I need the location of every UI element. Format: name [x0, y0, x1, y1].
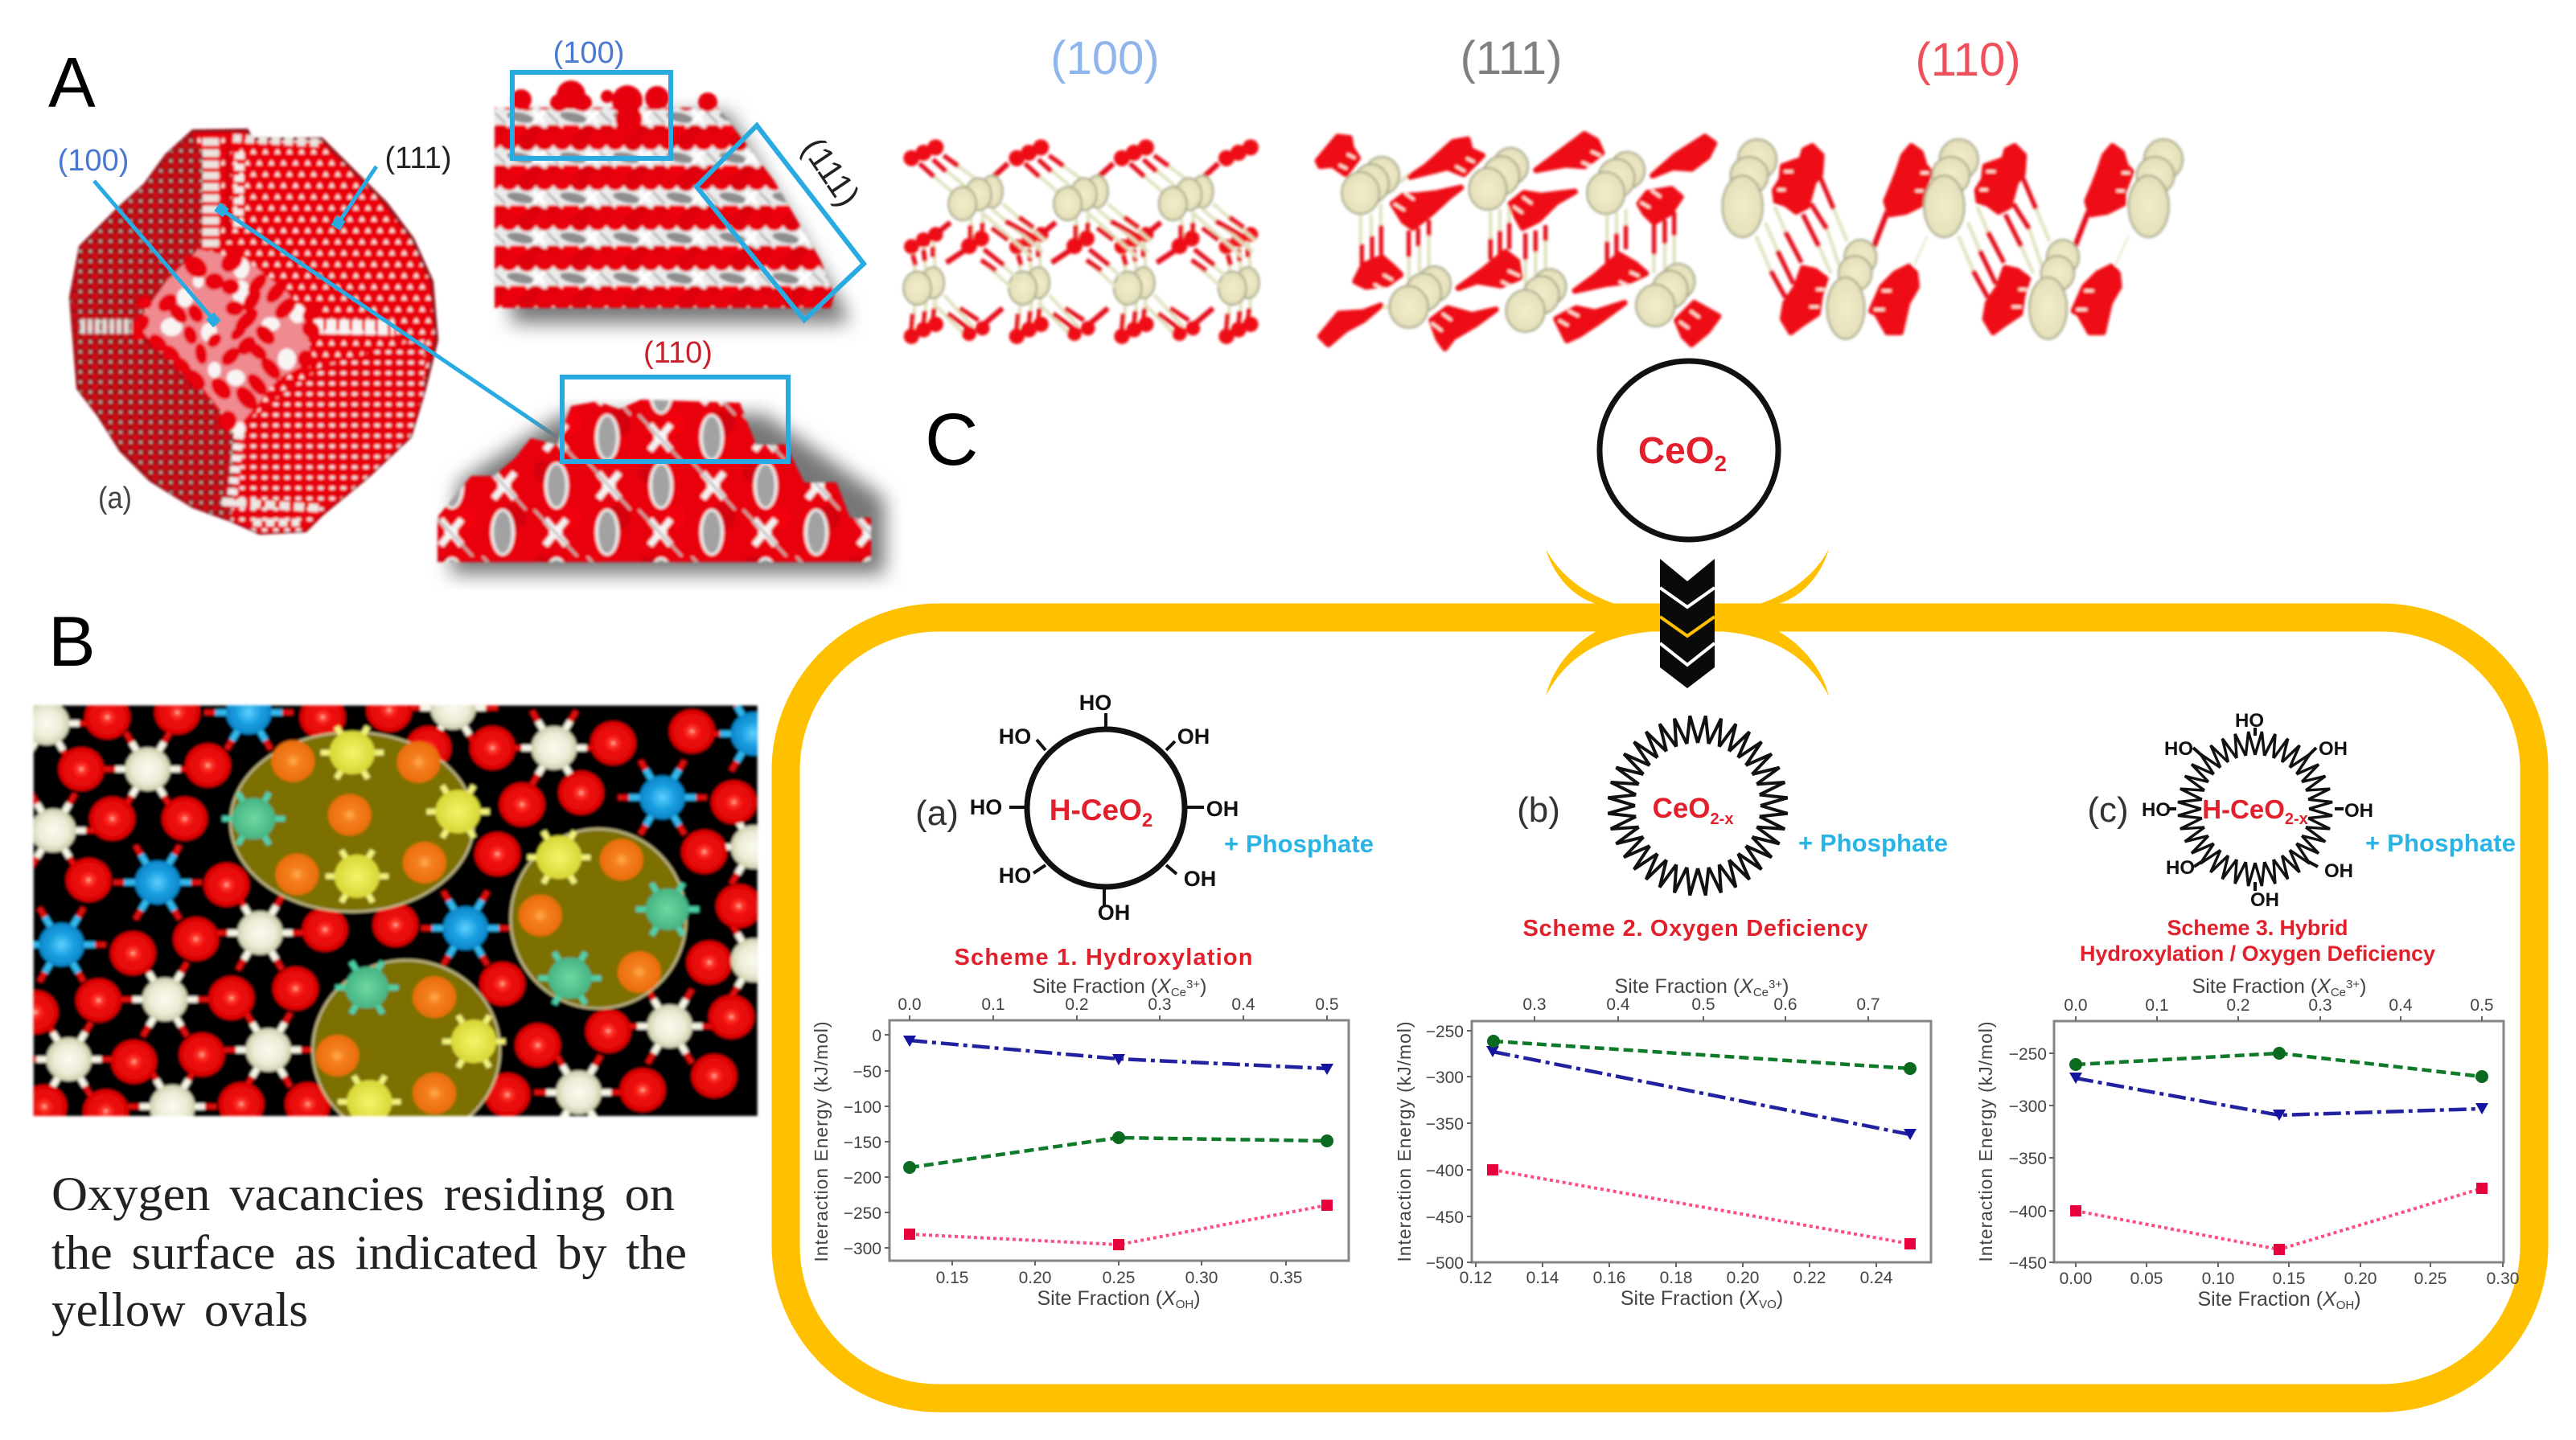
scheme (b): oxygen deficient particle: 2-x	[1711, 810, 1733, 828]
text block: caption	[51, 1167, 687, 1336]
label: (c): (c)	[2087, 790, 2129, 830]
crystal slab: (110) cross-section	[438, 400, 885, 574]
scheme (c): hybrid particle: OH	[2344, 800, 2373, 822]
heading: (111) structure: (111)	[1461, 32, 1562, 84]
heading: Scheme 2: Scheme 2. Oxygen Deficiency	[1523, 916, 1867, 942]
line chart: scheme 3 interaction energy: )	[2354, 1288, 2361, 1311]
label: (110) slab: (110)	[643, 336, 713, 370]
line chart: scheme 1 interaction energy: 0.25	[1103, 1269, 1135, 1287]
callout box: (100) region	[512, 72, 671, 158]
callout: vacancy oval 1	[222, 727, 490, 912]
label: (b): (b)	[1517, 790, 1560, 830]
line chart: scheme 3 interaction energy: −400	[2009, 1203, 2047, 1221]
line chart: scheme 1 interaction energy: 0	[872, 1027, 881, 1045]
bonds	[2, 671, 798, 1143]
line chart: scheme 2 interaction energy: Ce	[1753, 986, 1769, 999]
line chart: scheme 1 interaction energy: −250	[844, 1204, 881, 1223]
text block: caption: the surface as indicated by the	[51, 1226, 687, 1279]
arrow: black chevrons	[1660, 559, 1715, 688]
line chart: scheme 1 interaction energy: −50	[853, 1063, 881, 1081]
line chart: scheme 3 interaction energy: −300	[2009, 1097, 2047, 1116]
heading: (100) structure: (100)	[1050, 32, 1160, 84]
line chart: scheme 3 interaction energy: OH	[2336, 1298, 2354, 1312]
line chart: scheme 1 interaction energy: Site Fraction (X	[1037, 1287, 1176, 1310]
line chart: scheme 1 interaction energy	[811, 975, 1349, 1311]
line chart: scheme 3 interaction energy: 3+	[2346, 978, 2360, 991]
line chart: scheme 2 interaction energy: −300	[1426, 1069, 1464, 1087]
line chart: scheme 2 interaction energy: 0.5	[1691, 995, 1715, 1014]
scheme (c): hybrid particle: OH	[2250, 889, 2279, 911]
structure: (110) surface	[1723, 139, 2183, 339]
line chart: scheme 3 interaction energy: 0.20	[2344, 1270, 2377, 1288]
line chart: scheme 3 interaction energy: −450	[2009, 1254, 2047, 1273]
line chart: scheme 2 interaction energy: −450	[1426, 1208, 1464, 1227]
line chart: scheme 2 interaction energy: )	[1777, 1287, 1783, 1310]
label: (100) slab: (100)	[553, 36, 624, 70]
frame: rounded yellow border with flares	[786, 549, 2534, 1398]
line chart: scheme 3 interaction energy: 0.1	[2145, 996, 2169, 1015]
line chart: scheme 1 interaction energy: )	[1194, 1287, 1201, 1310]
scheme (a): hydroxylated particle: H-CeO	[1050, 794, 1142, 827]
line chart: scheme 3 interaction energy: Interaction Energy (kJ/mol)	[1975, 1021, 1996, 1262]
line chart: scheme 1 interaction energy: Interaction Energy (kJ/mol)	[811, 1021, 832, 1262]
heading: Scheme 3	[2080, 916, 2435, 966]
scheme (a): hydroxylated particle: OH	[1206, 797, 1239, 821]
panel: facet atomic structures	[903, 32, 2183, 348]
line chart: scheme 2 interaction energy: 0.24	[1860, 1269, 1893, 1287]
line chart: scheme 2 interaction energy: Site Fraction (X	[1615, 975, 1753, 998]
line chart: scheme 2 interaction energy: 0.16	[1593, 1269, 1625, 1287]
scheme (a): hydroxylated particle: OH	[1184, 867, 1216, 891]
line chart: scheme 3 interaction energy: 0.00	[2060, 1270, 2092, 1288]
icon: faceted CeO2 nanoparticle	[71, 130, 437, 533]
line chart: scheme 3 interaction energy: 0.25	[2414, 1270, 2447, 1288]
label: (a): (a)	[915, 794, 959, 833]
label: + Phosphate (b): + Phosphate	[1798, 829, 1948, 857]
callout: vacancy oval 3	[313, 960, 505, 1139]
scheme (c): hybrid particle: H-CeO	[2202, 794, 2285, 824]
line chart: scheme 1 interaction energy: 0.35	[1270, 1269, 1302, 1287]
line chart: scheme 3 interaction energy: 0.3	[2308, 996, 2332, 1015]
scheme (a): hydroxylated particle: OH	[1177, 724, 1210, 749]
line chart: scheme 1 interaction energy: 0.2	[1065, 995, 1089, 1014]
label: + Phosphate (a): + Phosphate	[1224, 830, 1374, 858]
line chart: scheme 3 interaction energy: −350	[2009, 1150, 2047, 1168]
line chart: scheme 3 interaction energy: )	[2360, 975, 2366, 998]
scheme (a): hydroxylated particle: 2	[1142, 810, 1152, 831]
line chart: scheme 1 interaction energy: 0.30	[1185, 1269, 1218, 1287]
label: (111) slab: (111)	[795, 131, 868, 213]
heading: C: C	[925, 399, 978, 481]
scheme (a): hydroxylated particle: HO	[999, 864, 1031, 888]
line chart: scheme 1 interaction energy: 0.3	[1148, 995, 1172, 1014]
line chart: scheme 1 interaction energy: Ce	[1171, 986, 1186, 999]
oxygen atoms	[13, 688, 762, 1133]
icon: CeO2 circle: CeO	[1638, 429, 1715, 471]
label: + Phosphate (c): + Phosphate	[2365, 829, 2516, 857]
panel B: oxygen vacancies	[2, 601, 798, 1336]
line chart: scheme 2 interaction energy: 0.20	[1727, 1269, 1759, 1287]
line chart: scheme 3 interaction energy: 0.4	[2389, 996, 2413, 1015]
line chart: scheme 3 interaction energy	[1975, 975, 2519, 1312]
line chart: scheme 1 interaction energy: −200	[844, 1169, 881, 1188]
line chart: scheme 1 interaction energy: 0.1	[981, 995, 1005, 1014]
line chart: scheme 1 interaction energy: 0.15	[936, 1269, 968, 1287]
line chart: scheme 1 interaction energy: Site Fraction (X	[1033, 975, 1171, 998]
line chart: scheme 1 interaction energy: )	[1200, 975, 1206, 998]
line chart: scheme 2 interaction energy: 3+	[1769, 978, 1782, 991]
callout box: (111) region	[696, 125, 864, 320]
scheme (b): oxygen deficient particle	[1588, 690, 1808, 921]
scheme (c): hybrid particle: OH	[2324, 860, 2353, 882]
label: (111) on particle: (111)	[384, 142, 452, 175]
structure: (111) surface	[1317, 134, 1719, 348]
icon: CeO2 circle: 2	[1715, 451, 1727, 476]
line chart: scheme 3 interaction energy: 0.30	[2487, 1270, 2519, 1288]
line chart: scheme 1 interaction energy: 0.20	[1019, 1269, 1051, 1287]
line chart: scheme 2 interaction energy: 0.12	[1460, 1269, 1492, 1287]
line chart: scheme 2 interaction energy: 0.18	[1660, 1269, 1692, 1287]
heading: Scheme 3: Hydroxylation / Oxygen Deficiency	[2080, 942, 2435, 966]
cerium atoms	[24, 686, 776, 1128]
line chart: scheme 2 interaction energy: 0.14	[1526, 1269, 1559, 1287]
text block: caption: Oxygen vacancies residing on	[51, 1167, 675, 1221]
line chart: scheme 3 interaction energy: Site Fraction (X	[2192, 975, 2331, 998]
line chart: scheme 1 interaction energy: −300	[844, 1240, 881, 1258]
scheme (a): hydroxylated particle: HO	[1079, 691, 1111, 715]
line chart: scheme 2 interaction energy: −250	[1426, 1023, 1464, 1041]
line chart: scheme 2 interaction energy: 0.22	[1793, 1269, 1826, 1287]
scheme (a): hydroxylated particle	[970, 691, 1239, 925]
line chart: scheme 3 interaction energy: 0.2	[2226, 996, 2250, 1015]
panel C: surface schemes frame	[786, 361, 2534, 1398]
line chart: scheme 2 interaction energy: Interaction Energy (kJ/mol)	[1394, 1021, 1415, 1262]
scheme (c): hybrid particle: HO	[2166, 857, 2195, 879]
line chart: scheme 3 interaction energy: 0.05	[2130, 1270, 2163, 1288]
line chart: scheme 2 interaction energy: −400	[1426, 1162, 1464, 1180]
line chart: scheme 2 interaction energy: 0.3	[1522, 995, 1547, 1014]
line chart: scheme 2 interaction energy: −500	[1426, 1254, 1464, 1273]
heading: Scheme 1: Scheme 1. Hydroxylation	[954, 945, 1253, 970]
scheme (a): hydroxylated particle: HO	[999, 724, 1031, 749]
scheme (c): hybrid particle: OH	[2319, 738, 2348, 760]
text block: caption: yellow ovals	[51, 1283, 308, 1336]
line chart: scheme 2 interaction energy: )	[1782, 975, 1789, 998]
line chart: scheme 2 interaction energy: −350	[1426, 1115, 1464, 1134]
line chart: scheme 1 interaction energy: 0.0	[898, 995, 922, 1014]
scheme (c): hybrid particle	[2142, 709, 2373, 911]
structure: (100) surface	[903, 139, 1259, 344]
line chart: scheme 2 interaction energy: VO	[1759, 1298, 1777, 1311]
icon: CeO2 circle	[1600, 361, 1778, 539]
line chart: scheme 3 interaction energy: −250	[2009, 1045, 2047, 1064]
line chart: scheme 3 interaction energy: 0.5	[2470, 996, 2494, 1015]
line chart: scheme 3 interaction energy: 0.15	[2273, 1270, 2305, 1288]
scheme (c): hybrid particle: HO	[2142, 799, 2171, 821]
callout box: (110) region	[562, 377, 788, 462]
central cross of large surface atoms	[131, 248, 321, 435]
scheme (c): hybrid particle: HO	[2235, 710, 2264, 732]
line chart: scheme 3 interaction energy: Ce	[2331, 986, 2346, 999]
heading: B: B	[48, 601, 96, 681]
line chart: scheme 1 interaction energy: −150	[844, 1134, 881, 1152]
line chart: scheme 3 interaction energy: 0.10	[2202, 1270, 2234, 1288]
line chart: scheme 2 interaction energy	[1394, 975, 1931, 1311]
panel A: ceria nanoparticle and facets	[48, 36, 885, 574]
arrow: leader lines from facets	[94, 166, 560, 439]
line chart: scheme 1 interaction energy: −100	[844, 1098, 881, 1117]
label: (100) on particle: (100)	[58, 144, 129, 178]
line chart: scheme 1 interaction energy: 0.5	[1315, 995, 1339, 1014]
scheme (a): hydroxylated particle: HO	[970, 795, 1002, 819]
label: (a): (a)	[98, 482, 132, 515]
scheme (c): hybrid particle: HO	[2164, 738, 2193, 760]
line chart: scheme 1 interaction energy: 3+	[1186, 978, 1200, 991]
line chart: scheme 2 interaction energy: 0.7	[1856, 995, 1880, 1014]
line chart: scheme 1 interaction energy: 0.4	[1231, 995, 1255, 1014]
image: atomic surface with vacancies	[31, 703, 760, 1118]
line chart: scheme 2 interaction energy: 0.4	[1606, 995, 1630, 1014]
scheme (c): hybrid particle: 2-x	[2285, 810, 2308, 828]
callout: vacancy oval 2	[511, 829, 699, 1008]
crystal slab: (100)/(111) cross-section	[495, 80, 849, 323]
scheme (a): hydroxylated particle: OH	[1098, 901, 1130, 925]
line chart: scheme 2 interaction energy: 0.6	[1773, 995, 1797, 1014]
heading: A: A	[48, 43, 96, 122]
scheme (b): oxygen deficient particle: CeO	[1653, 793, 1711, 824]
line chart: scheme 2 interaction energy: Site Fraction (X	[1621, 1287, 1759, 1310]
heading: Scheme 3: Scheme 3. Hybrid	[2167, 916, 2348, 940]
line chart: scheme 3 interaction energy: Site Fraction (X	[2197, 1288, 2336, 1311]
line chart: scheme 1 interaction energy: OH	[1176, 1298, 1194, 1311]
heading: (110) structure: (110)	[1915, 34, 2021, 86]
line chart: scheme 3 interaction energy: 0.0	[2064, 996, 2088, 1015]
